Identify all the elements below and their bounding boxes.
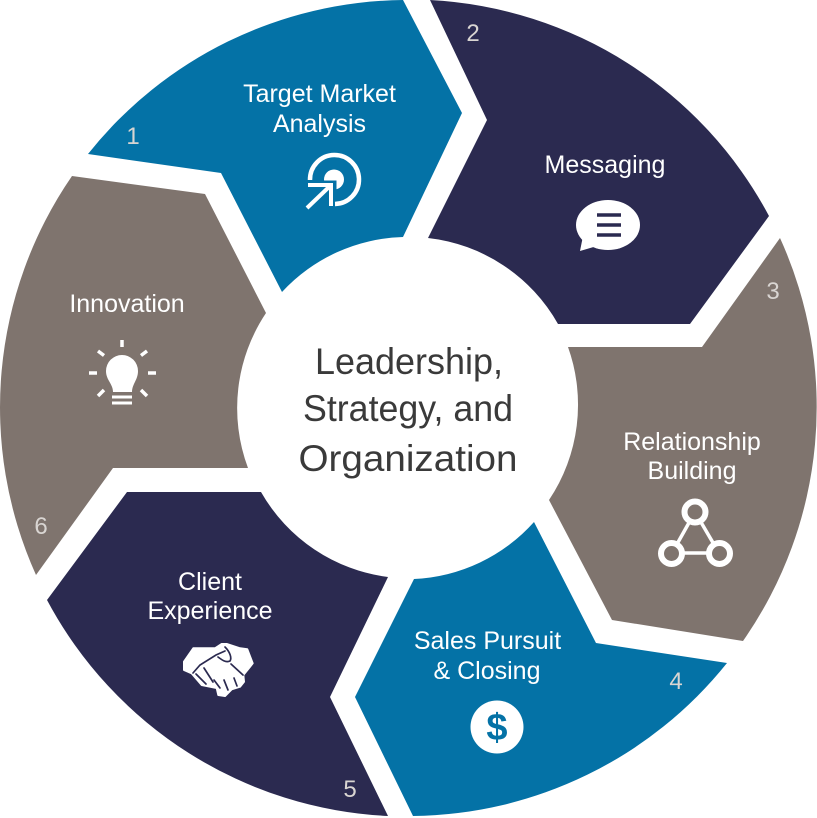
panel: 5 client experience: Experience	[147, 597, 273, 625]
center heading: Strategy, and	[303, 388, 513, 429]
number 3: 3	[766, 278, 780, 305]
label: relationship building: Relationship	[623, 428, 761, 456]
center heading: Leadership,	[315, 341, 503, 382]
number 5: 5	[343, 776, 357, 803]
panel: 3 relationship building	[549, 238, 817, 641]
icon: speech bubble	[576, 200, 640, 251]
icon: light bulb	[89, 340, 156, 403]
label: messaging: Messaging	[545, 151, 665, 179]
panel: 4 sales pursuit and closing: & Closing	[434, 657, 540, 685]
panel: 2 messaging	[428, 0, 769, 324]
number 1: 1	[126, 123, 140, 150]
number 4: 4	[669, 668, 683, 695]
icon: connected triangle	[661, 502, 730, 564]
center heading: Organization	[298, 438, 518, 479]
panel: 3 relationship building: Building	[648, 457, 736, 485]
panel: 6 innovation	[0, 176, 266, 575]
icon: dollar coin: $	[486, 707, 508, 749]
panel: 5 client experience	[47, 492, 388, 816]
panel: 1 target market analysis	[88, 0, 462, 292]
number 6: 6	[34, 513, 48, 540]
label: innovation: Innovation	[69, 290, 185, 318]
label: client experience: Client	[178, 568, 242, 596]
icon: dollar coin	[470, 700, 524, 754]
panel: 1 target market analysis: Analysis	[273, 110, 366, 138]
center heading	[298, 341, 518, 479]
icon: target with arrow	[306, 155, 359, 210]
label: sales pursuit and closing: Sales Pursuit	[414, 627, 561, 655]
icon: handshake	[184, 644, 253, 696]
label: target market analysis: Target Market	[243, 80, 396, 108]
panel: 4 sales pursuit and closing	[355, 522, 727, 816]
number 2: 2	[466, 20, 480, 47]
